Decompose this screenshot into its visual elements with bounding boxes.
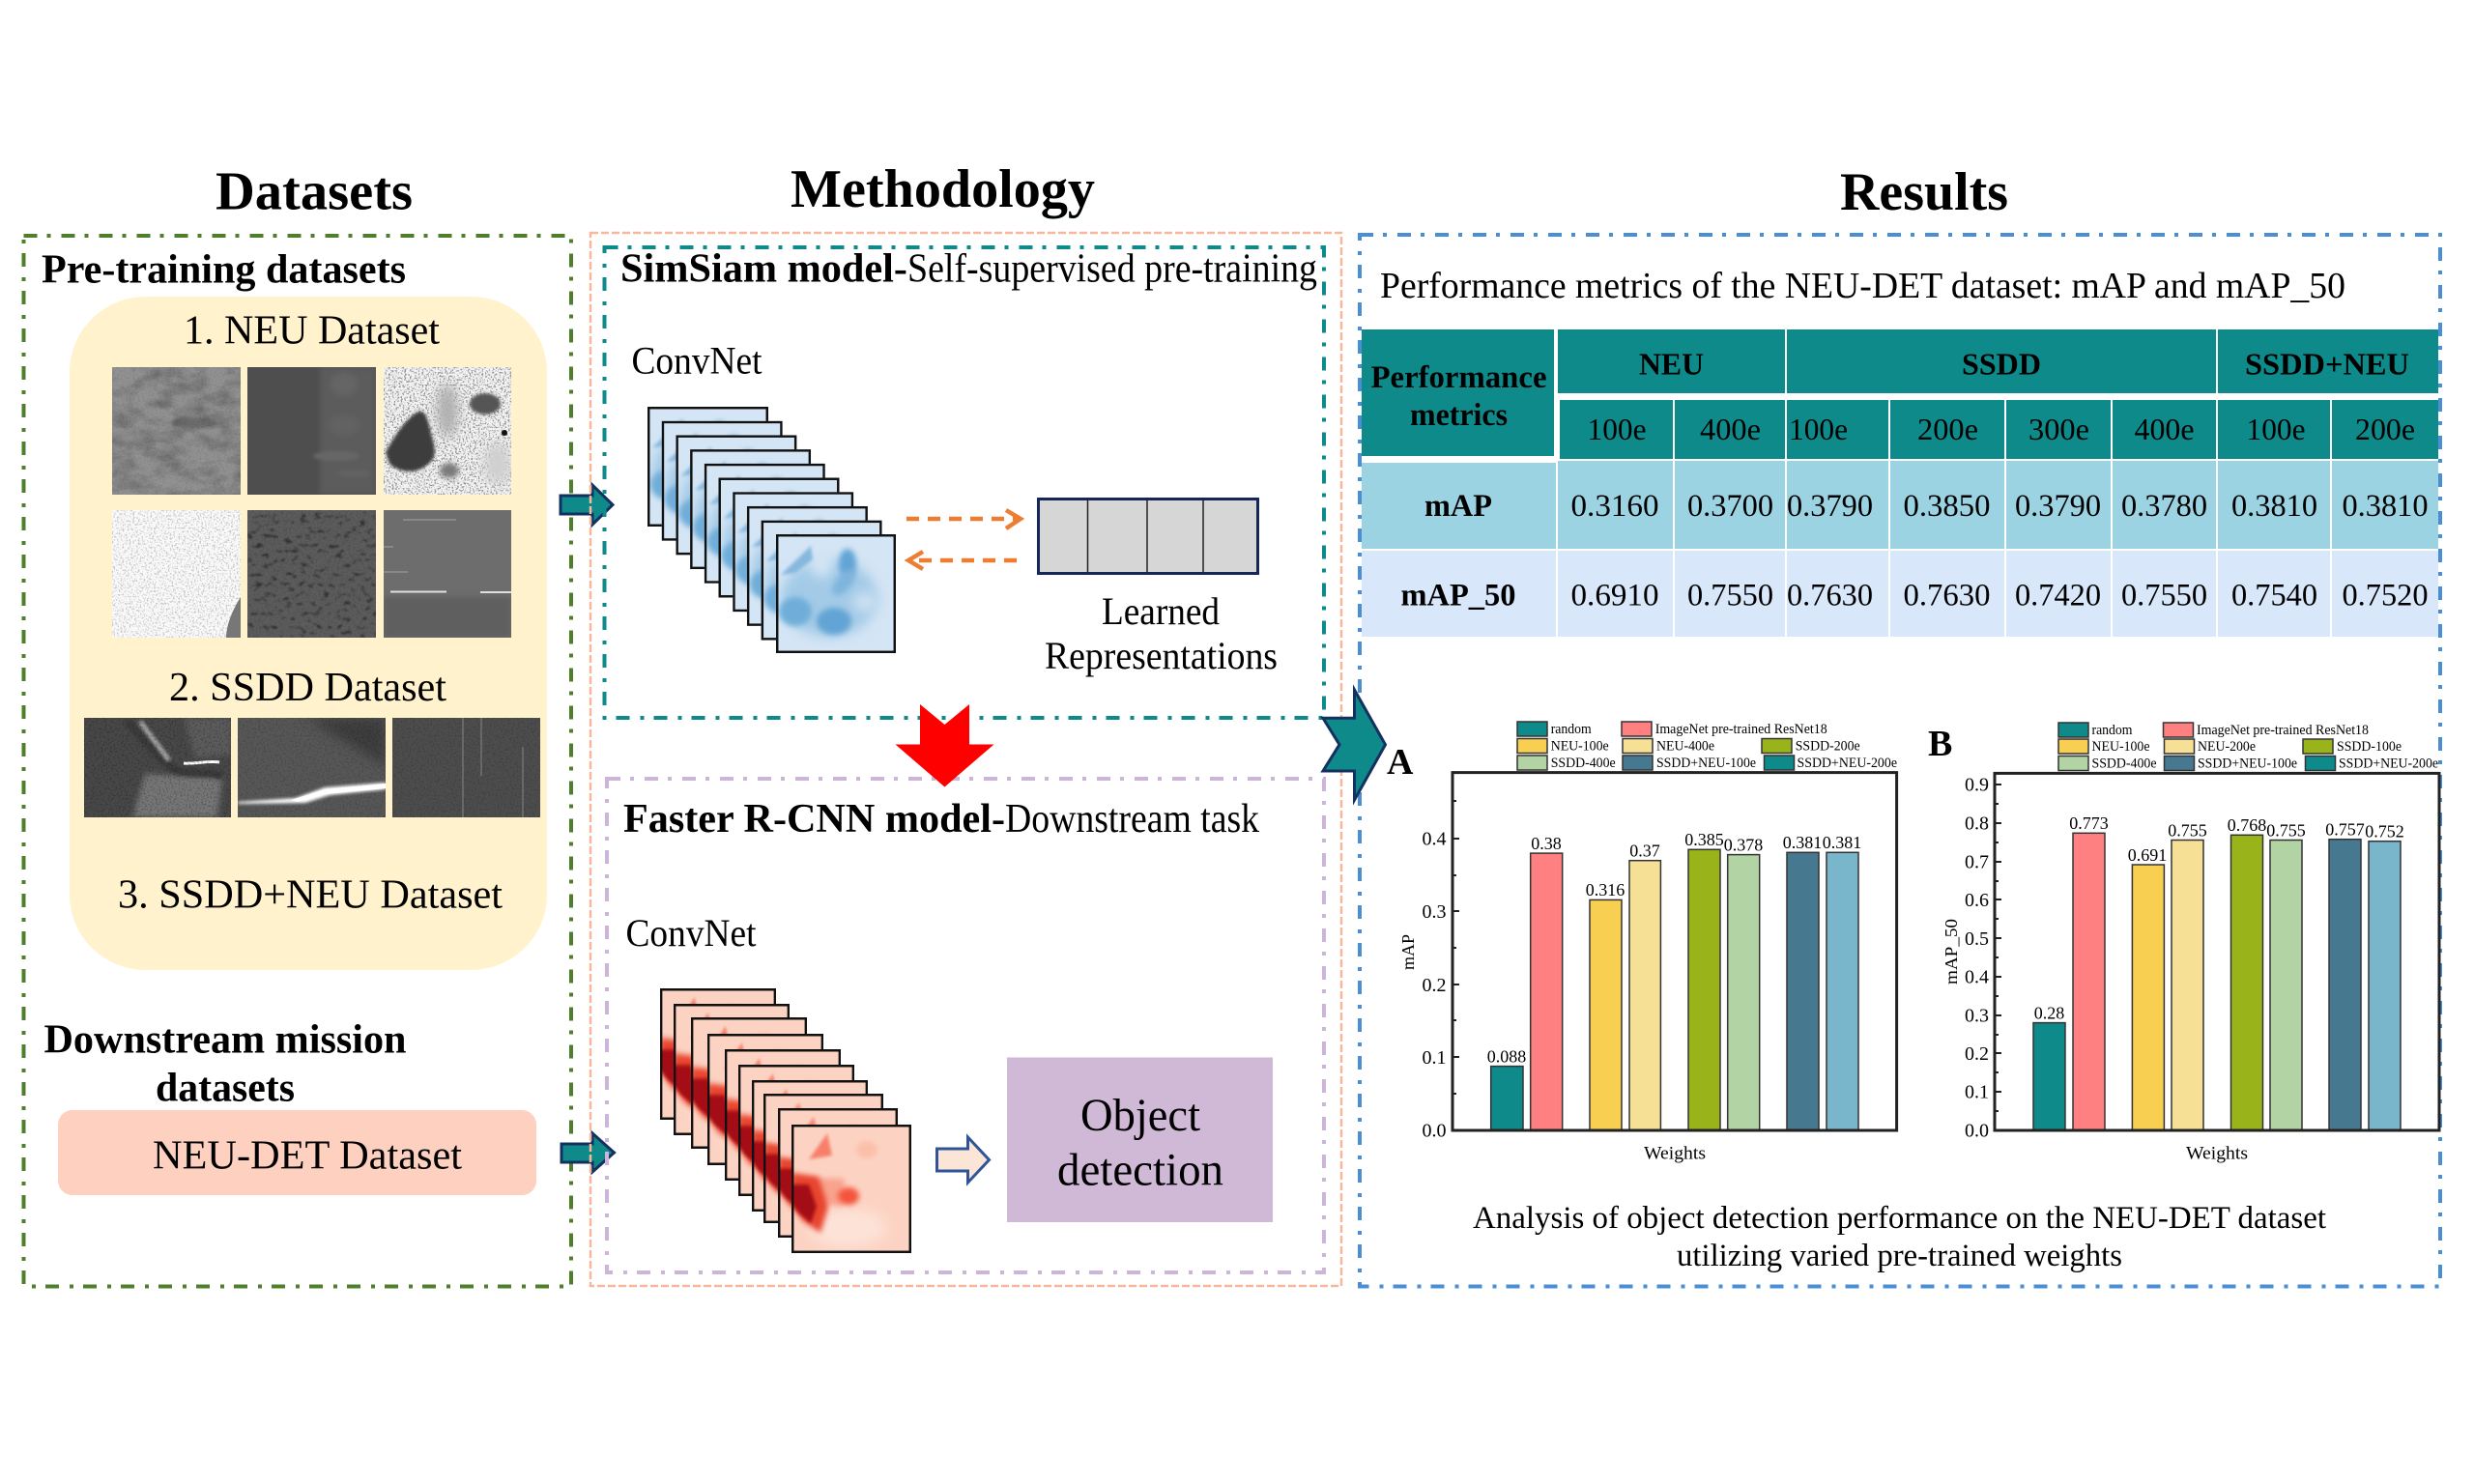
heading: pre-training datasets: Pre-training datasets bbox=[42, 247, 406, 292]
table row: mAP_50: mAP_50 bbox=[1401, 578, 1515, 613]
panel: results bbox=[1360, 235, 2440, 1287]
table row: mAP: 0.3790 bbox=[2015, 489, 2101, 524]
heading: Faster R-CNN model: Faster R-CNN model- bbox=[623, 797, 1005, 842]
box: object detection bbox=[1007, 1057, 1273, 1222]
arrow: methodology to results bbox=[1323, 690, 1386, 800]
tick labels B: 0.3 bbox=[1965, 1005, 1989, 1026]
image: NEU sample 1 bbox=[112, 367, 241, 495]
image: NEU sample 3 bbox=[384, 367, 511, 495]
image: NEU sample 2 bbox=[247, 367, 376, 495]
table row: mAP: 0.3790 bbox=[1787, 489, 1873, 524]
bar value labels B: 0.768 bbox=[2228, 815, 2266, 835]
table row: mAP: 0.3810 bbox=[2343, 489, 2428, 524]
bar value labels A: 0.378 bbox=[1724, 835, 1763, 854]
legend A: ImageNet pre-trained ResNet18 bbox=[1655, 722, 1827, 737]
tick labels A: 0.3 bbox=[1423, 901, 1446, 923]
axes A bbox=[1453, 773, 1897, 1130]
bar value labels A: 0.381 bbox=[1783, 833, 1822, 852]
legend B: NEU-100e bbox=[2091, 739, 2149, 755]
tick labels B: 0.4 bbox=[1965, 966, 1989, 987]
image: SSDD sample 3 bbox=[392, 718, 540, 817]
arrow: feature maps to object detection bbox=[937, 1137, 990, 1183]
heading: downstream mission datasets bbox=[44, 1018, 406, 1111]
table header: 300e bbox=[2028, 412, 2089, 446]
tick labels A bbox=[1423, 829, 1446, 1142]
axis title: Weights: Weights bbox=[1644, 1144, 1706, 1163]
table header: metrics bbox=[1410, 398, 1508, 433]
arrow: forward dashed bbox=[906, 510, 1021, 528]
tick labels A: 0.2 bbox=[1423, 975, 1446, 996]
tick labels B: 0.1 bbox=[1965, 1082, 1989, 1103]
heading: downstream mission datasets: datasets bbox=[156, 1067, 295, 1111]
bars A bbox=[1491, 849, 1858, 1130]
heading: SimSiam model: Self-supervised pre-training bbox=[907, 247, 1317, 292]
heading: downstream mission datasets: Downstream mission bbox=[44, 1018, 406, 1063]
table row: mAP_50: 0.7420 bbox=[2015, 578, 2101, 613]
heading: Faster R-CNN model bbox=[623, 797, 1259, 842]
box: NEU-DET dataset: NEU-DET Dataset bbox=[153, 1134, 462, 1179]
bar value labels B: 0.757 bbox=[2325, 819, 2365, 839]
axis title: mAP: mAP bbox=[1398, 934, 1418, 970]
image: SSDD sample 1 bbox=[84, 718, 231, 817]
table row: mAP: 0.3700 bbox=[1687, 489, 1773, 524]
label: ConvNet: ConvNet bbox=[632, 338, 762, 383]
legend B: SSDD-100e bbox=[2337, 739, 2402, 755]
legend B bbox=[2058, 723, 2438, 771]
chart B: mAP_50 bar chart bbox=[1928, 723, 2439, 1163]
bars B bbox=[2033, 833, 2401, 1130]
legend B: SSDD+NEU-100e bbox=[2198, 756, 2297, 771]
legend A bbox=[1517, 722, 1897, 771]
legend A: SSDD+NEU-100e bbox=[1656, 756, 1756, 771]
tick labels B: 0.9 bbox=[1965, 775, 1989, 796]
box: learned representation vector bbox=[1038, 499, 1258, 574]
caption: Analysis of object detection performance on the NEU-DET dataset bbox=[1473, 1201, 2326, 1236]
panel: Faster R-CNN model bbox=[607, 779, 1324, 1272]
box: object detection: detection bbox=[1057, 1144, 1223, 1196]
table header: 400e bbox=[1700, 412, 1761, 446]
tick labels B bbox=[1965, 775, 1989, 1142]
axes B bbox=[1995, 773, 2439, 1130]
table header: 400e bbox=[2134, 412, 2194, 446]
table header: 100e bbox=[2246, 412, 2306, 446]
table row: mAP: 0.3810 bbox=[2231, 489, 2317, 524]
bar value labels A: 0.381 bbox=[1823, 833, 1861, 852]
tick labels B: 0.8 bbox=[1965, 813, 1989, 835]
table row: mAP: 0.3850 bbox=[1904, 489, 1991, 524]
bar value labels B: 0.755 bbox=[2266, 821, 2306, 841]
bar value labels B bbox=[2034, 813, 2404, 1022]
heading: Datasets: Datasets bbox=[216, 162, 413, 222]
panel: methodology bbox=[590, 233, 1341, 1286]
table row: mAP_50: 0.7550 bbox=[1687, 578, 1773, 613]
heading: Results: Results bbox=[1840, 162, 2008, 222]
box: object detection: Object bbox=[1080, 1090, 1201, 1141]
heading: Methodology: Methodology bbox=[791, 159, 1095, 219]
legend A: SSDD-400e bbox=[1551, 756, 1616, 771]
table header bbox=[1362, 329, 2438, 459]
table row: mAP_50: 0.7540 bbox=[2231, 578, 2317, 613]
legend B: SSDD+NEU-200e bbox=[2339, 756, 2438, 771]
label: SSDD dataset: 2. SSDD Dataset bbox=[169, 666, 446, 710]
table row: mAP: mAP bbox=[1424, 489, 1492, 524]
axis title: Weights: Weights bbox=[2186, 1144, 2248, 1163]
bar value labels A: 0.38 bbox=[1531, 834, 1562, 853]
image: NEU sample 5 bbox=[247, 510, 376, 638]
tick labels B: 0.0 bbox=[1965, 1121, 1989, 1142]
arrow: NEU-DET dataset to Faster R-CNN bbox=[561, 1133, 615, 1172]
icon: blue feature map stack bbox=[647, 407, 896, 653]
legend B: random bbox=[2091, 723, 2133, 738]
table: performance metrics bbox=[1362, 329, 2438, 637]
table row: mAP_50: 0.7550 bbox=[2121, 578, 2207, 613]
table row: mAP_50: 0.7630 bbox=[1787, 578, 1873, 613]
label: A: A bbox=[1387, 742, 1414, 783]
tick labels A: 0.1 bbox=[1423, 1047, 1446, 1069]
table header: SSDD bbox=[1962, 346, 2041, 381]
tick labels A: 0.4 bbox=[1423, 829, 1446, 850]
heading: Faster R-CNN model: Downstream task bbox=[1005, 797, 1259, 842]
bar value labels A: 0.088 bbox=[1487, 1047, 1526, 1067]
legend A: NEU-400e bbox=[1656, 738, 1714, 754]
table header: 200e bbox=[1917, 412, 1978, 446]
table row: mAP: 0.3780 bbox=[2121, 489, 2207, 524]
table row: mAP_50: 0.6910 bbox=[1571, 578, 1658, 613]
arrow: pre-training datasets to SimSiam bbox=[561, 485, 613, 525]
axis title: mAP_50: mAP_50 bbox=[1942, 919, 1961, 985]
table row: mAP bbox=[1362, 461, 2438, 549]
tick labels B: 0.6 bbox=[1965, 890, 1989, 911]
image: SSDD sample 2 bbox=[238, 718, 386, 817]
legend A: random bbox=[1551, 722, 1592, 737]
table header: 100e bbox=[1587, 412, 1647, 446]
panel: datasets bbox=[23, 236, 571, 1287]
arrow: backward dashed bbox=[908, 552, 1017, 569]
table row: mAP: 0.3160 bbox=[1571, 489, 1658, 524]
table row: mAP_50 bbox=[1362, 551, 2438, 637]
table row: mAP_50: 0.7520 bbox=[2343, 578, 2428, 613]
table header: SSDD+NEU bbox=[2245, 346, 2409, 381]
bar value labels B: 0.691 bbox=[2128, 845, 2167, 865]
heading: table title: Performance metrics of the NEU-DET dataset: mAP and mAP_50 bbox=[1380, 266, 2345, 306]
label: SSDD+NEU dataset: 3. SSDD+NEU Dataset bbox=[118, 873, 503, 918]
label: B: B bbox=[1928, 724, 1952, 764]
heading: SimSiam model bbox=[620, 247, 1317, 292]
label: ConvNet: ConvNet bbox=[626, 911, 756, 955]
tick labels B: 0.5 bbox=[1965, 928, 1989, 950]
caption bbox=[1473, 1201, 2326, 1273]
legend B: NEU-200e bbox=[2198, 739, 2256, 755]
label: learned representations bbox=[1045, 589, 1278, 677]
bar value labels A: 0.385 bbox=[1684, 830, 1724, 849]
image: NEU sample 4 bbox=[112, 510, 241, 638]
legend A: NEU-100e bbox=[1551, 738, 1609, 754]
panel: SimSiam model bbox=[605, 247, 1324, 718]
legend B: ImageNet pre-trained ResNet18 bbox=[2197, 723, 2369, 738]
caption: utilizing varied pre-trained weights bbox=[1677, 1239, 2122, 1273]
tick labels B: 0.2 bbox=[1965, 1043, 1989, 1065]
tick labels A: 0.0 bbox=[1423, 1121, 1446, 1142]
bar value labels A bbox=[1487, 830, 1861, 1067]
bar value labels A: 0.316 bbox=[1586, 880, 1625, 899]
image: NEU sample 6 bbox=[384, 510, 511, 638]
table header: NEU bbox=[1639, 346, 1704, 381]
label: learned representations: Learned bbox=[1102, 589, 1220, 633]
table header: 200e bbox=[2355, 412, 2415, 446]
legend A: SSDD-200e bbox=[1796, 738, 1860, 754]
bar value labels B: 0.773 bbox=[2069, 813, 2109, 833]
icon: red feature map stack bbox=[660, 988, 911, 1253]
chart A: mAP bar chart bbox=[1387, 722, 1897, 1163]
bar value labels B: 0.28 bbox=[2034, 1003, 2064, 1022]
legend B: SSDD-400e bbox=[2091, 756, 2157, 771]
bar value labels B: 0.752 bbox=[2365, 821, 2404, 841]
legend A: SSDD+NEU-200e bbox=[1798, 756, 1897, 771]
table row: mAP_50: 0.7630 bbox=[1904, 578, 1991, 613]
table header: Performance bbox=[1370, 360, 1546, 395]
bar value labels A: 0.37 bbox=[1629, 841, 1660, 860]
tick labels B: 0.7 bbox=[1965, 852, 1989, 873]
heading: SimSiam model: SimSiam model- bbox=[620, 247, 907, 292]
box: NEU-DET dataset bbox=[58, 1110, 536, 1195]
label: NEU dataset: 1. NEU Dataset bbox=[184, 309, 440, 354]
arrow: SimSiam to Faster R-CNN bbox=[895, 704, 993, 786]
panel: pre-training dataset group bbox=[70, 297, 547, 970]
table header: 100e bbox=[1789, 412, 1848, 446]
bar value labels B: 0.755 bbox=[2168, 821, 2207, 841]
label: learned representations: Representations bbox=[1045, 634, 1278, 677]
